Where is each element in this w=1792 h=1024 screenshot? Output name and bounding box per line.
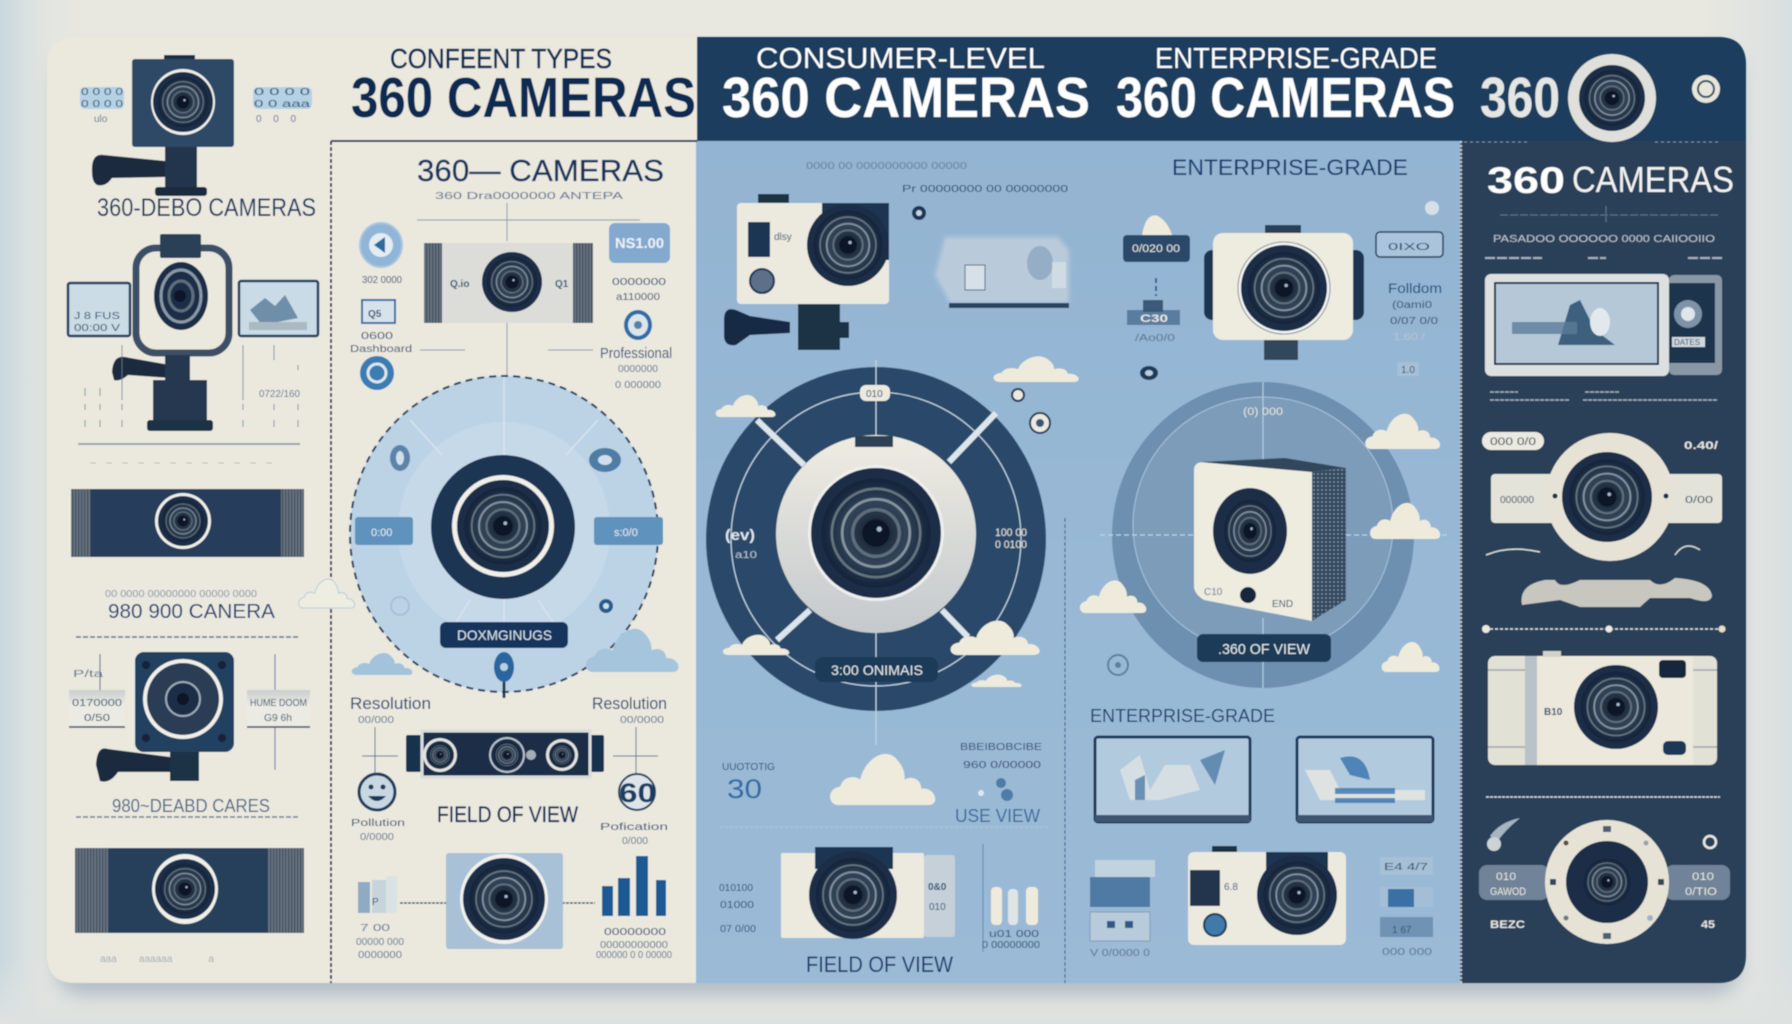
camera: silver camera: Q1 — [555, 279, 569, 290]
diagram: consumer dial — [706, 360, 1046, 745]
text: enterprise right notes: 0/07 0/0 — [1390, 316, 1439, 327]
camera: consumer bottom camera: 010 — [929, 902, 946, 913]
tab: right: s:0/0 — [614, 527, 638, 539]
icon: blue square — [362, 300, 395, 323]
cloud: enterprise left — [1080, 580, 1146, 613]
camera: dark column dial — [1545, 820, 1669, 944]
label: documents pill — [440, 622, 568, 648]
heading: 360 cameras: CAMERAS — [1572, 159, 1734, 200]
panel: cream section — [47, 37, 697, 983]
icon: enterprise faint badge — [1108, 655, 1128, 675]
chart: white bars — [983, 844, 1038, 952]
text: dial right: 0 0100 — [995, 539, 1027, 551]
camera: dark column ring camera: 000000 — [1500, 495, 1534, 506]
camera: consumer bottom camera: 0&0 — [928, 882, 947, 893]
icon: enterprise left block: /Ao0/0 — [1135, 333, 1176, 344]
text: dial right — [995, 527, 1027, 551]
text: consumer left stat: UUOTOTIG — [722, 762, 775, 773]
cloud: large blue — [586, 629, 679, 672]
text: consumer subtitle: 0000 00 0000000000 00000 — [806, 161, 968, 172]
text: white bars caption — [982, 929, 1040, 951]
column: second section — [299, 153, 679, 961]
text: dial left — [725, 527, 758, 561]
text: dashboard caption: Dashboard — [350, 344, 412, 355]
icon: right dial — [624, 310, 652, 340]
callout: right camera specs: G9 6h — [264, 713, 292, 724]
title: 360 cameras consumer: 360 CAMERAS — [722, 66, 1090, 130]
text: subtitle: PASADOO OOOOOO 0000 CAIIOOIIO — [1493, 234, 1715, 245]
icon: center camera lens — [431, 455, 575, 599]
icon: blue pin — [494, 652, 514, 698]
cloud: big below dial — [830, 754, 935, 805]
camera: enterprise cube: END — [1272, 599, 1293, 610]
divider: dotted two — [1486, 796, 1720, 798]
text: consumer camera left specs — [719, 883, 756, 935]
camera: faded base sketch — [1486, 546, 1712, 607]
camera: ghost camera — [935, 237, 1069, 308]
icon: small header dial — [1692, 75, 1720, 103]
tab: dial left: GAWOD — [1490, 886, 1526, 898]
camera: enterprise bottom: 6.8 — [1224, 882, 1238, 893]
camera: enterprise cube — [1194, 458, 1346, 621]
column: enterprise section — [1080, 155, 1450, 959]
callout: left camera specs — [69, 654, 125, 727]
text: right publication: Pofication — [600, 822, 668, 833]
labels: right of top camera — [253, 87, 312, 125]
text: left mini chart caption: 00000 000 — [356, 937, 404, 948]
text: enterprise right notes: 1.60 / — [1393, 332, 1425, 343]
camera: silver camera — [424, 243, 593, 323]
text: dashboard caption: 0600 — [361, 331, 394, 342]
text: right caption: 0000000 — [612, 277, 667, 288]
camera: top action camera — [92, 55, 234, 196]
icon: header lens — [1568, 54, 1656, 142]
tab: dial right: 0/TIO — [1685, 886, 1718, 898]
text: bar chart caption — [596, 927, 672, 961]
text: screen caption — [1490, 392, 1718, 400]
camera: enterprise white camera — [1204, 225, 1364, 360]
text: bar chart caption: 00000000000 — [600, 940, 668, 951]
camera: dark column compact — [1488, 651, 1717, 765]
panel: dark header band — [697, 37, 1746, 141]
cloud: dial lower left — [723, 635, 789, 655]
text: left mini chart caption: 7 00 — [360, 923, 391, 934]
screen: tablet preview — [1485, 274, 1722, 376]
camera: dark column ring camera: 0/00 — [1685, 495, 1714, 506]
screen: tablet preview: DATES — [1674, 338, 1700, 347]
camera: consumer action camera: dlsy — [774, 232, 792, 243]
labels: right of top camera: 0 0 0 0 — [254, 87, 311, 98]
text: bar chart caption: 000000 0 0 00000 — [596, 950, 672, 961]
text: consumer subtitle — [806, 161, 1069, 195]
diagram: field of view circle — [350, 376, 663, 698]
icon stack: enterprise left — [1090, 860, 1155, 959]
text: consumer right stat: BBEIBOBCIBE — [960, 742, 1042, 753]
camera: enterprise cube: C10 — [1204, 587, 1223, 598]
text: use view: USE VIEW — [955, 806, 1040, 826]
camera: dark column ring camera — [1491, 433, 1722, 561]
labels: left of top camera: 0 0 0 0 — [81, 87, 124, 98]
chart lines under cage camera — [78, 345, 300, 463]
column: consumer-level section — [706, 161, 1079, 977]
text: white bars caption: 0 00000000 — [982, 940, 1040, 951]
labels: left of top camera: ulo — [94, 114, 108, 125]
text: professional: Professional — [600, 345, 672, 362]
text: dashboard caption — [350, 331, 412, 355]
heading: 360 cameras — [1487, 159, 1734, 201]
divider: dotted one — [1482, 625, 1726, 633]
heading: field of view consumer: FIELD OF VIEW — [806, 952, 953, 977]
icon stack: enterprise right: 1 67 — [1392, 925, 1412, 936]
screen: left preview: J 8 FUS — [74, 311, 120, 322]
icon: dial side marks — [1012, 389, 1050, 433]
label: enterprise left badge — [1123, 215, 1190, 262]
camera: tri-lens bar — [406, 731, 604, 777]
text: white bars caption: u01 000 — [989, 929, 1040, 940]
camera: consumer bottom camera — [781, 847, 955, 939]
text: small caption above camera name: 00 0000 00000000 00000 0000 — [105, 589, 257, 600]
cloud: dial bottom — [971, 675, 1022, 687]
title: 360 cameras dark: 360 CAMERAS — [351, 66, 696, 130]
camera: wide bottom camera — [75, 848, 304, 933]
chart: mini ghost bars: P — [372, 897, 379, 908]
screen: left preview — [68, 283, 130, 336]
text: professional — [600, 345, 672, 391]
tab: dial left: 010 — [1496, 871, 1516, 883]
panel: light blue body — [696, 141, 1462, 983]
text: resolution right: Resolution — [592, 694, 667, 713]
labels: left of top camera — [80, 87, 124, 125]
label: dial bottom: 3:00 ONIMAIS — [831, 662, 923, 678]
text: left caption: 302 0000 — [362, 275, 402, 286]
text: enterprise right notes: 1.0 — [1401, 365, 1415, 376]
callout: right camera specs: HUME DOOM — [250, 698, 307, 709]
connector: right emblem — [613, 715, 665, 810]
connector: right emblem: 00/0000 — [620, 715, 665, 726]
chart: mini ghost bars — [358, 876, 397, 913]
diagram: enterprise field of view — [1100, 382, 1450, 688]
text: enterprise right notes: Folldom — [1388, 280, 1442, 296]
camera: consumer action camera — [724, 194, 889, 350]
text: right caption — [612, 277, 667, 303]
icon: blue square: Q5 — [368, 309, 382, 320]
pill: top label — [860, 385, 890, 401]
camera: silver square lens — [400, 853, 595, 949]
labels: right of top camera: 0 0 aaa — [254, 99, 311, 110]
icon: consumer small dial — [912, 206, 926, 220]
text: bar chart caption: 00000000 — [604, 927, 667, 938]
text: right caption: a110000 — [616, 292, 660, 303]
tab: right — [594, 517, 663, 545]
text: left mini chart caption: 0000000 — [358, 950, 402, 961]
cloud: dial top left — [716, 395, 775, 417]
camera: dark column compact: B10 — [1544, 707, 1563, 718]
heading: field of view: FIELD OF VIEW — [437, 802, 578, 827]
tab: left: 0:00 — [371, 527, 392, 539]
title: 360: 360 — [1480, 66, 1560, 130]
lens: dial centre — [776, 435, 976, 633]
pill: top label: 010 — [866, 389, 883, 400]
badge: price: NS1.00 — [615, 235, 664, 252]
callout: left camera specs: 0/50 — [84, 713, 111, 724]
icon: comet mark — [1487, 818, 1520, 851]
label: documents pill: DOXMGINUGS — [457, 627, 552, 643]
text: dial foot left: BEZC — [1490, 919, 1525, 931]
text: small chart caption: 0722/160 — [259, 389, 300, 400]
text: subtitle: 360 Dra0000000 ANTEPA — [435, 191, 624, 202]
chart: blue bars — [602, 856, 666, 916]
heading: 360-degree cameras faded: 980~DEABD CARES — [112, 796, 270, 816]
labels: right of top camera: 0 0 0 — [256, 114, 296, 125]
camera: framed cage camera — [112, 234, 229, 431]
icon: enterprise corner marks — [1140, 201, 1439, 380]
camera: enterprise bottom — [1188, 846, 1346, 945]
text: left pollution — [351, 818, 405, 843]
text: professional: 0 000000 — [615, 380, 661, 391]
floor tint — [0, 960, 1792, 1024]
icon stack: enterprise left: V 0/0000 0 — [1090, 948, 1151, 959]
icon stack: enterprise right — [1380, 857, 1433, 958]
text: consumer camera left specs: 01000 — [720, 900, 755, 911]
text: consumer right stat: 960 0/00000 — [963, 760, 1042, 771]
text: right publication: 0/000 — [622, 836, 648, 847]
heading: 360 camera: 980 900 CANERA — [108, 601, 276, 623]
text: consumer camera left specs: 07 0/00 — [720, 924, 756, 935]
cloud: dial top right — [993, 356, 1079, 382]
screen: right preview — [239, 281, 318, 336]
label: enterprise right badge: 0IXO — [1388, 242, 1430, 253]
label: enterprise left badge: 0/020 00 — [1132, 243, 1180, 255]
title: different types: CONFEENT TYPES — [390, 43, 612, 74]
camera: silver camera: Q.io — [450, 279, 469, 290]
label: enterprise right badge — [1376, 232, 1443, 257]
icon: lower blue circle — [360, 356, 394, 390]
tab: left — [355, 517, 413, 545]
icon: small ring — [1704, 836, 1716, 848]
text: faint footer: aaa aaaaaa a — [100, 954, 214, 965]
text: consumer left stat — [722, 762, 775, 804]
pill: dark column label — [1482, 432, 1544, 450]
icon stack: enterprise right: E4 4/7 — [1384, 862, 1429, 873]
diagram: enterprise field of view: (0) 000 — [1243, 406, 1283, 418]
text: professional: 0000000 — [618, 364, 658, 375]
cloud: enterprise right middle — [1370, 503, 1440, 539]
heading: enterprise grade: ENTERPRISE-GRADE — [1172, 155, 1408, 180]
pill: dark column label: 000 0/0 — [1490, 436, 1536, 448]
text: enterprise right notes — [1388, 280, 1442, 376]
tab: dial left — [1479, 865, 1549, 900]
icon: blue circle — [360, 223, 402, 267]
text: left pollution: 0/0000 — [360, 832, 394, 843]
camera: square mounted camera — [96, 652, 234, 782]
text: dark column right note: 0.40/ — [1684, 440, 1718, 452]
text: resolution left: Resolution — [350, 694, 431, 713]
title: 360 cameras enterprise: 360 CAMERAS — [1116, 66, 1455, 130]
panel: dark right column — [1460, 37, 1746, 983]
icon: enterprise left block: C30 — [1140, 313, 1168, 325]
cloud: enterprise right lower — [1382, 642, 1440, 672]
screen: enterprise right — [1297, 737, 1433, 822]
title: enterprise grade: ENTERPRISE-GRADE — [1155, 43, 1437, 75]
text: right publication — [600, 822, 668, 847]
badge: price — [609, 223, 670, 263]
text: dial right: 100 00 — [995, 527, 1027, 539]
column: dark right section — [1479, 159, 1734, 944]
camera: wide dark camera — [71, 489, 304, 557]
label: dial bottom — [815, 657, 938, 682]
icon: enterprise left block — [1127, 278, 1180, 344]
tab: dial right — [1665, 865, 1730, 900]
heading: 360 cameras: 360 — [1487, 160, 1565, 201]
text: dial foot right: 45 — [1701, 919, 1715, 931]
labels: left of top camera: 0 0 0 0 — [81, 99, 124, 110]
text: left pollution: Pollution — [351, 818, 405, 829]
text: consumer left stat: 30 — [727, 774, 762, 804]
text: dial left: (ev) — [725, 527, 755, 544]
text: consumer camera left specs: 010100 — [719, 883, 753, 894]
heading: enterprise grade lower: ENTERPRISE-GRADE — [1090, 706, 1275, 726]
icon stack: enterprise right: 000 000 — [1382, 947, 1433, 958]
cloud: border — [299, 579, 355, 608]
cloud: enterprise right upper — [1365, 414, 1440, 449]
title: consumer level: CONSUMER-LEVEL — [756, 43, 1045, 75]
dividers — [331, 141, 1720, 983]
text: consumer subtitle: Pr 00000000 00 00000000 — [902, 184, 1069, 195]
text: left mini chart caption — [356, 923, 404, 961]
screen: enterprise left — [1095, 737, 1250, 822]
cloud: small blue — [352, 653, 412, 675]
text: consumer right stat — [960, 742, 1042, 801]
screen: left preview: 00:00 V — [74, 323, 120, 334]
cloud: dial lower right — [951, 621, 1040, 655]
callout: left camera specs: 0170000 — [72, 698, 123, 709]
connector: left emblem: 00/000 — [358, 715, 395, 726]
callout: left camera specs: P/ta — [73, 669, 104, 680]
text: dial left: a10 — [735, 550, 758, 561]
connector: left emblem — [358, 715, 398, 810]
column: left camera types — [68, 55, 318, 965]
callout: right camera specs — [247, 654, 310, 770]
tab: dial right: 010 — [1692, 871, 1714, 883]
heading: 360-debo cameras: 360-DEBO CAMERAS — [97, 194, 316, 222]
icon: dial marks — [390, 445, 621, 615]
connector: right emblem: 60 — [619, 778, 656, 808]
text: enterprise right notes: (0ami0 — [1392, 300, 1433, 311]
label: 360 of view — [1197, 634, 1331, 662]
label: 360 of view: .360 OF VIEW — [1218, 641, 1311, 658]
heading: 360 cameras: 360— CAMERAS — [417, 153, 664, 188]
